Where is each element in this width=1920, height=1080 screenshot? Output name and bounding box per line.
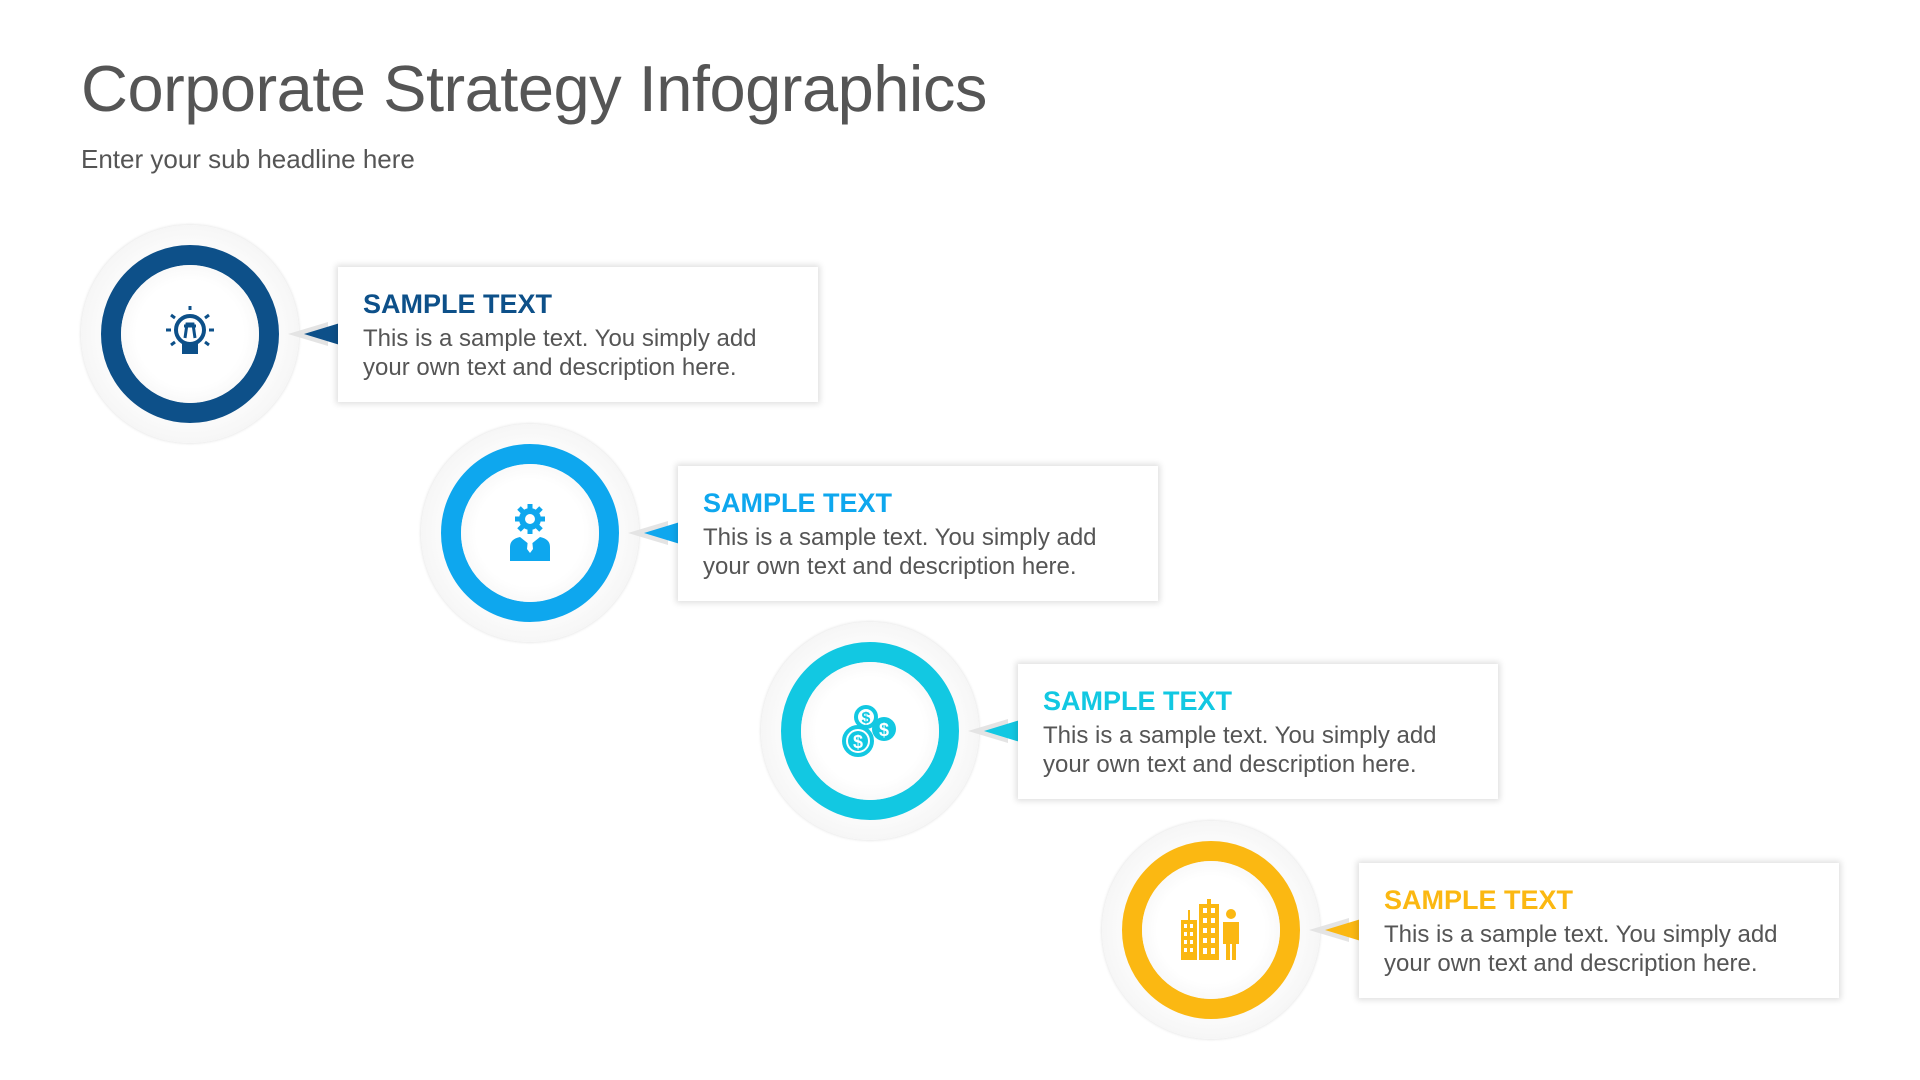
text box 3 <box>1018 664 1498 799</box>
icon: coins: $ <box>879 720 889 740</box>
icon: person with gear <box>510 504 550 561</box>
pointer <box>628 521 678 545</box>
title: Corporate Strategy Infographics <box>81 52 987 125</box>
icon: coins: $ <box>853 732 863 752</box>
step 3 <box>760 621 1502 841</box>
text box 4: SAMPLE TEXT <box>1384 885 1573 915</box>
text box 1: your own text and description here. <box>363 354 737 381</box>
text box 2: SAMPLE TEXT <box>703 488 892 518</box>
icon: light bulb <box>166 306 214 354</box>
step 1 <box>80 224 822 444</box>
text box 4: This is a sample text. You simply add <box>1384 921 1778 948</box>
text box 4 <box>1359 863 1839 998</box>
text box 1 <box>338 267 818 402</box>
icon: coins: $ <box>862 710 871 727</box>
text box 4: your own text and description here. <box>1384 950 1758 977</box>
pointer <box>968 719 1018 743</box>
text box 2: This is a sample text. You simply add <box>703 524 1097 551</box>
step 2 <box>420 423 1162 643</box>
pointer <box>1310 918 1359 942</box>
icon: coins <box>842 705 896 757</box>
icon: buildings and person <box>1181 899 1239 960</box>
subtitle: Enter your sub headline here <box>81 144 415 174</box>
step 4 <box>1101 820 1843 1040</box>
text box 3: your own text and description here. <box>1043 751 1417 778</box>
text box 1: This is a sample text. You simply add <box>363 325 757 352</box>
text box 3: This is a sample text. You simply add <box>1043 722 1437 749</box>
text box 1: SAMPLE TEXT <box>363 289 552 319</box>
text box 2 <box>678 466 1158 601</box>
text box 2: your own text and description here. <box>703 553 1077 580</box>
pointer <box>288 322 338 346</box>
text box 3: SAMPLE TEXT <box>1043 686 1232 716</box>
